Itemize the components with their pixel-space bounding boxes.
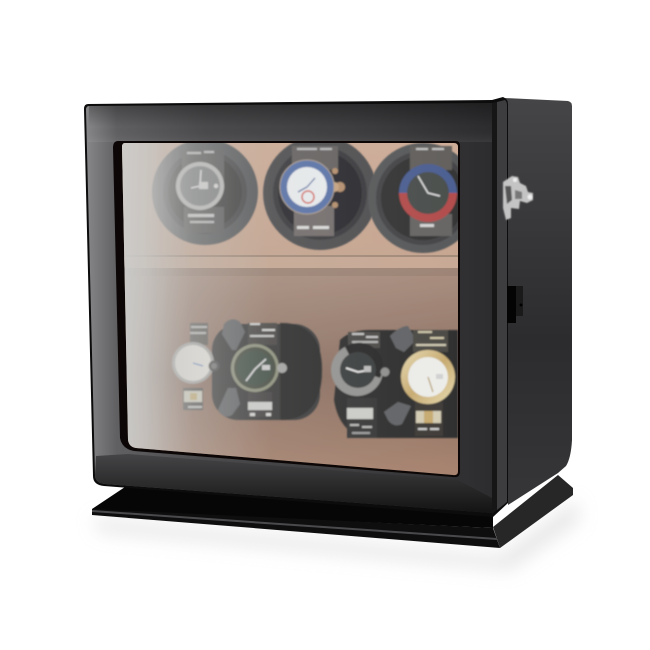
- cabinet door frame: [84, 97, 508, 517]
- side power switch: [507, 286, 523, 323]
- top-right winder and watch: [368, 143, 458, 254]
- ladies watch: [190, 323, 208, 345]
- bottom-left winder pair and watches: [172, 319, 322, 420]
- rubber pads: [222, 319, 245, 350]
- product illustration: watch winder cabinet: [84, 97, 580, 572]
- green submariner: [248, 323, 277, 345]
- gold yacht-master watch: [413, 330, 448, 352]
- base plinth: [92, 475, 573, 548]
- top-centre winder and watch: [263, 136, 377, 250]
- rubber pads: [390, 326, 416, 352]
- silver latch: [503, 176, 533, 220]
- cabinet side panel: [505, 98, 572, 505]
- glass haze reflection: [122, 143, 376, 462]
- glass window interior: [122, 143, 458, 476]
- window recess edge: [113, 141, 460, 477]
- bottom-right winder pair and watches: [331, 326, 458, 438]
- shelf: [110, 255, 462, 276]
- floor shadow: [92, 500, 580, 570]
- GMT watch: [348, 332, 380, 348]
- top-left winder and watch: [152, 139, 258, 245]
- back wall: [110, 140, 462, 480]
